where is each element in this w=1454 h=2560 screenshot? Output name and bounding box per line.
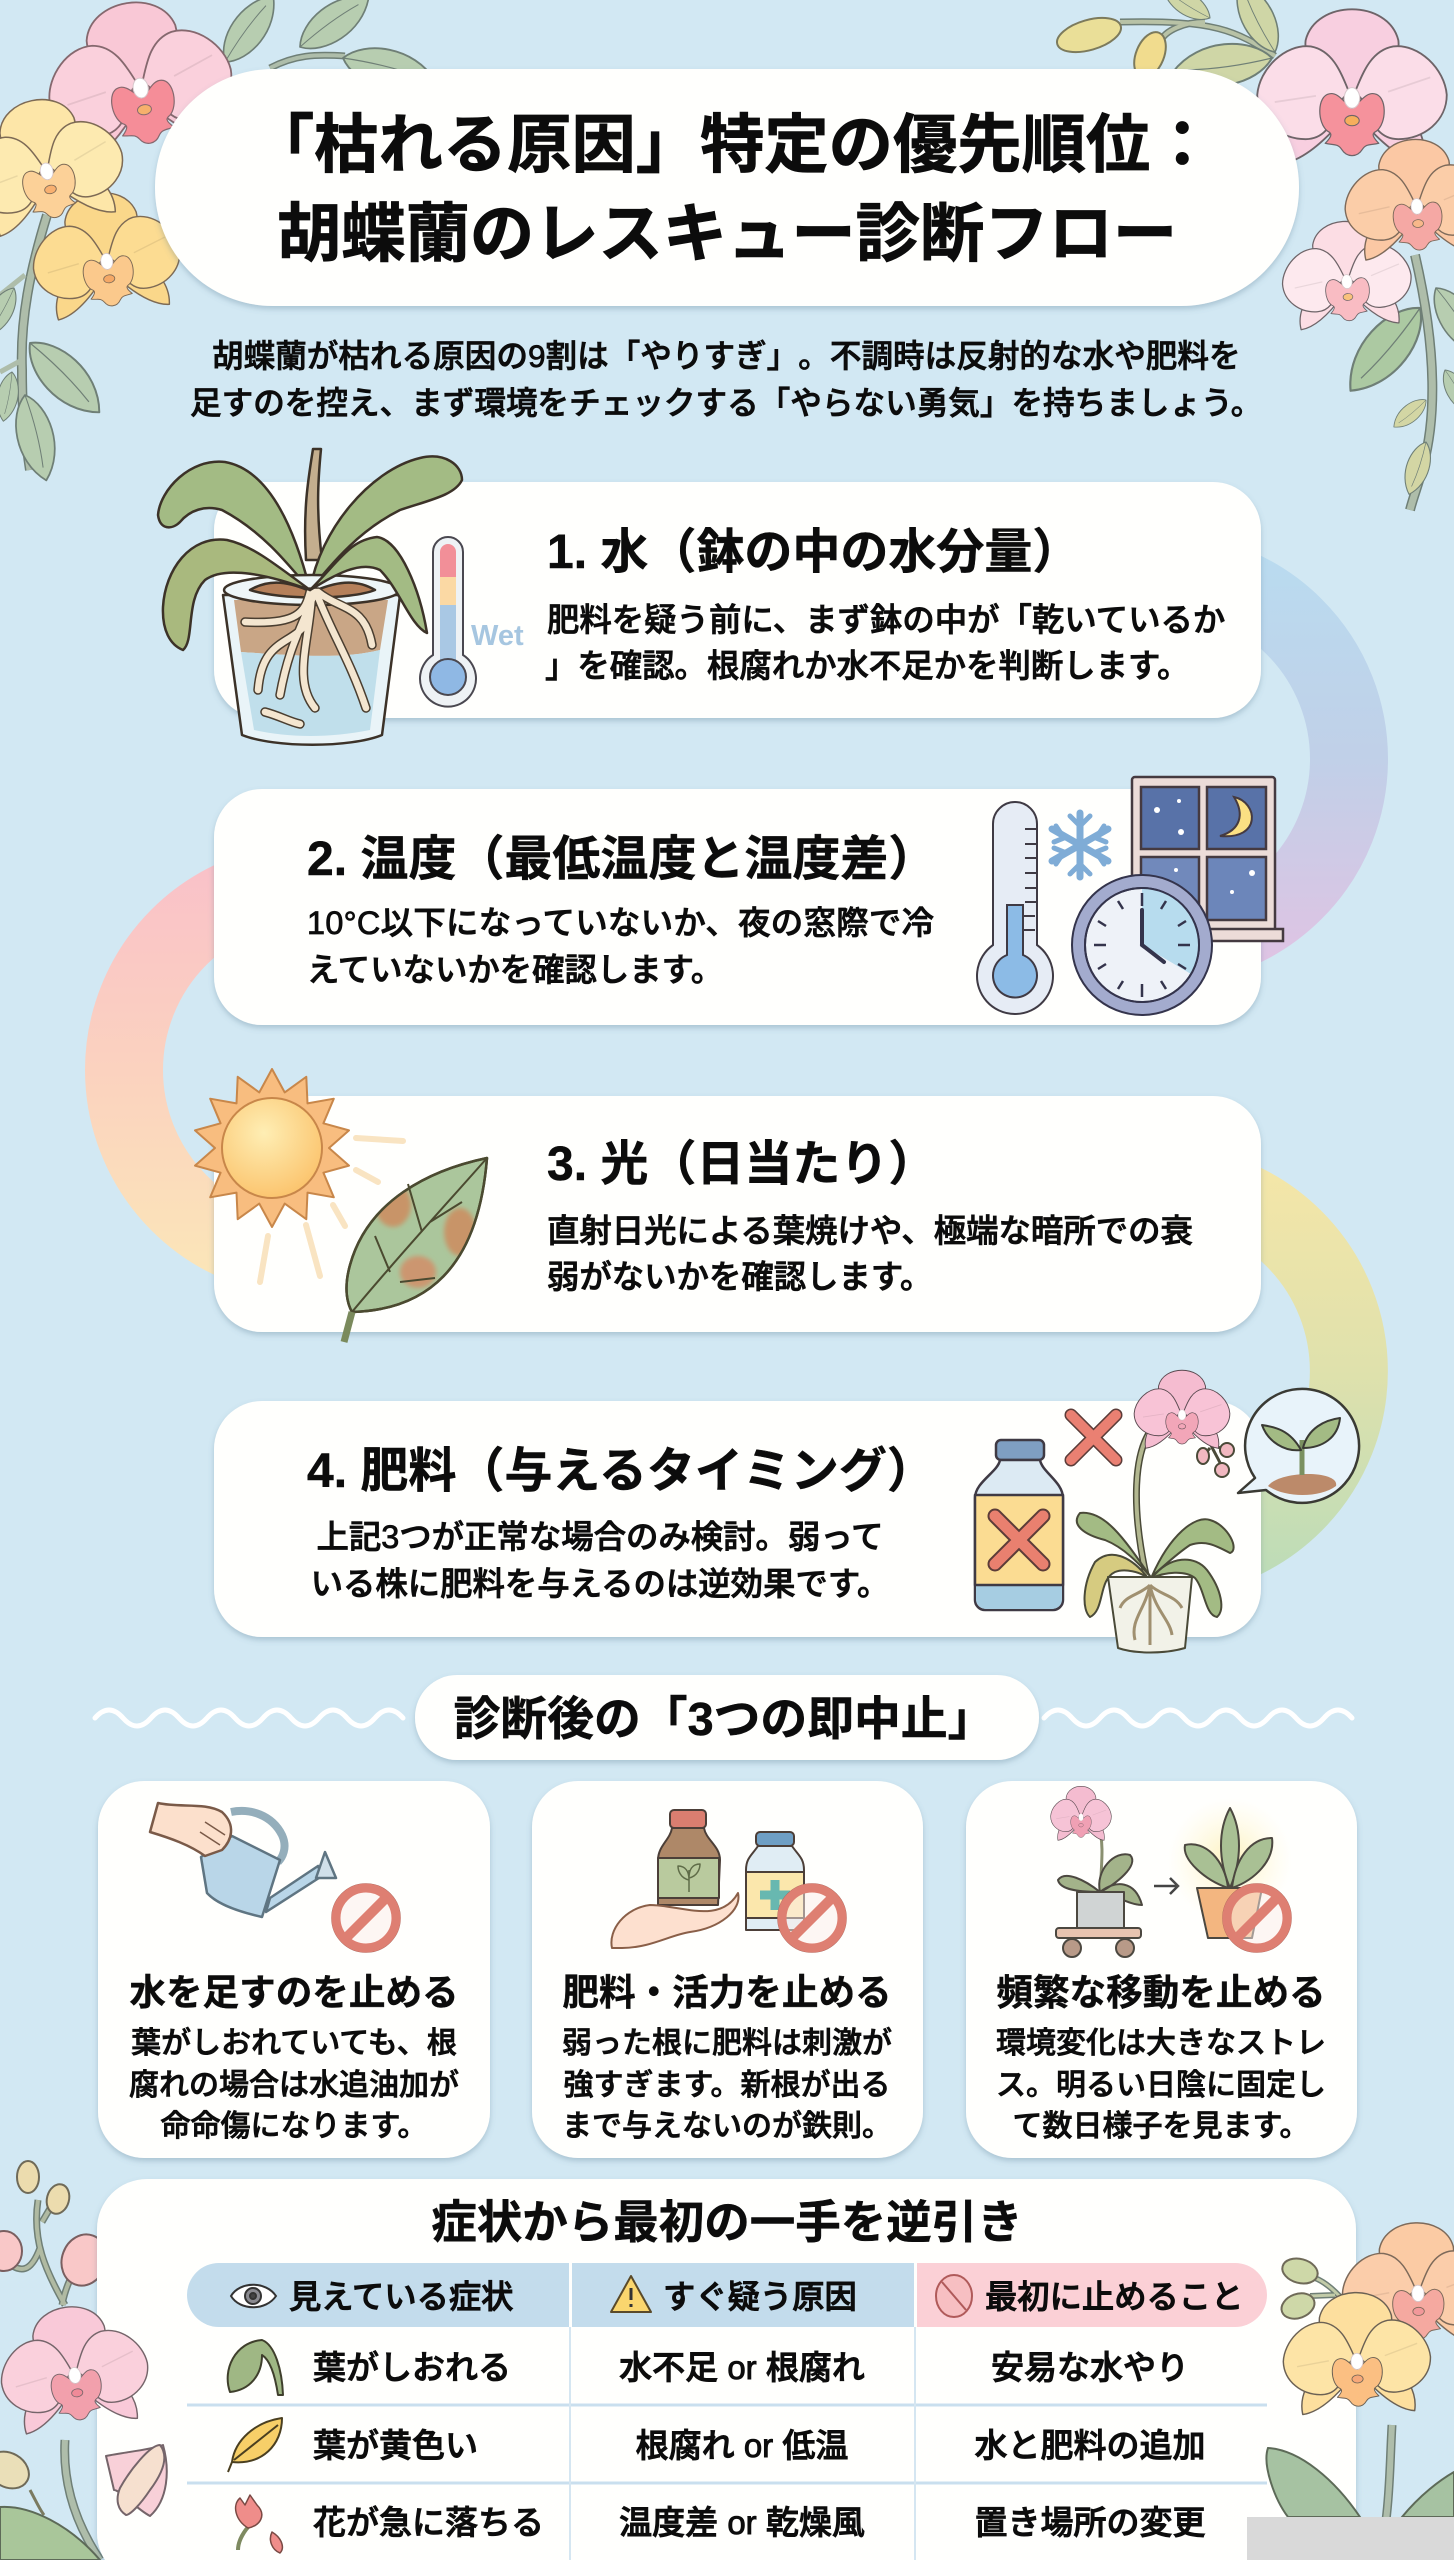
text: stop 1: 安易な水やり <box>991 2349 1189 2386</box>
text: stop header: 最初に止めること <box>985 2279 1243 2315</box>
icon: prohibition sign <box>332 1884 400 1952</box>
text: step 2 <box>307 905 934 988</box>
text: symptom header: 見えている症状 <box>289 2279 513 2315</box>
row: yellow leaves <box>228 2418 1206 2472</box>
icon: fertilizer bottle with cross <box>975 1440 1063 1610</box>
panel: stop moving <box>966 1781 1357 2158</box>
text: step 3: 弱がないかを確認します。 <box>547 1259 932 1295</box>
text: symptom 2: 葉が黄色い <box>313 2427 478 2464</box>
panel: step 1 water <box>158 449 1261 745</box>
text: step 1: 肥料を疑う前に、まず鉢の中が「乾いているか <box>547 602 1225 638</box>
row: wilted leaves <box>228 2340 1189 2395</box>
text: step 3 <box>547 1213 1193 1295</box>
icon: plant in sunlight <box>1168 1798 1292 1938</box>
icon: stop sign <box>936 2275 972 2317</box>
decoration: top-right orchids <box>1053 0 1454 510</box>
heading: step 3: 3. 光（日当たり） <box>547 1138 936 1191</box>
text: cause 2: 根腐れ or 低温 <box>636 2427 848 2464</box>
icon: scorched leaf <box>344 1158 487 1342</box>
text: step 3: 直射日光による葉焼けや、極端な暗所での衰 <box>547 1213 1193 1249</box>
heading: table title: 症状から最初の一手を逆引き <box>431 2197 1023 2248</box>
icon: watering can <box>150 1803 336 1917</box>
heading: stop moving: 頻繁な移動を止める <box>996 1972 1326 2013</box>
icon: prohibition sign <box>778 1884 846 1952</box>
heading: stop water: 水を足すのを止める <box>129 1972 459 2013</box>
decoration: bottom-right orchids <box>1266 2220 1454 2520</box>
icon: sun <box>195 1069 403 1282</box>
text: stop moving <box>996 2027 1326 2143</box>
text: stop water: 葉がしおれていても、根 <box>131 2027 457 2060</box>
text: step 1 <box>545 602 1225 684</box>
icon: speech bubble seedling <box>1238 1389 1359 1503</box>
intro text: 足すのを控え、まず環境をチェックする「やらない勇気」を持ちましょう。 <box>190 385 1262 421</box>
panel: step 2 temperature <box>214 777 1283 1025</box>
icon: prohibition sign <box>1223 1884 1291 1952</box>
icon: fallen petal <box>106 2445 167 2516</box>
divider: wave right <box>1044 1710 1352 1726</box>
text: symptom 3: 花が急に落ちる <box>313 2504 544 2541</box>
table header <box>187 2263 1267 2327</box>
icon: orchid in pot <box>1077 1370 1234 1652</box>
decoration: bottom-left orchid <box>0 2297 167 2516</box>
icon: thermometer cold <box>977 802 1053 1014</box>
panel: symptom table <box>97 2179 1356 2560</box>
title panel <box>155 69 1299 306</box>
text: cause 3: 温度差 or 乾燥風 <box>619 2504 865 2541</box>
text: stop moving: ス。明るい日陰に固定し <box>996 2069 1326 2102</box>
text: stop moving: て数日様子を見ます。 <box>1012 2110 1310 2143</box>
arrow: flow arc temperature to light <box>124 882 312 1258</box>
text: stop fertilizer: 弱った根に肥料は刺激が <box>562 2027 892 2060</box>
icon: warning triangle <box>611 2276 651 2312</box>
row: dropping flowers <box>236 2495 1206 2553</box>
intro text: 胡蝶蘭が枯れる原因の9割は「やりすぎ」。不調時は反射的な水や肥料を <box>212 338 1241 374</box>
icon: night window <box>1132 777 1283 941</box>
panel: stop fertilizer <box>532 1781 923 2158</box>
text: step 4: いる株に肥料を与えるのは逆効果です。 <box>311 1566 889 1602</box>
icon: red cross <box>1071 1415 1116 1460</box>
text: stop fertilizer: 強すぎます。新根が出る <box>564 2069 890 2102</box>
text: stop water: 命命傷になります。 <box>160 2110 428 2143</box>
title line 2: 胡蝶蘭のレスキュー診断フロー <box>277 198 1177 270</box>
text: step 2: えていないかを確認します。 <box>307 952 723 988</box>
icon: orchid on cart <box>1051 1786 1142 1957</box>
text: stop water <box>129 2027 459 2143</box>
text: stop fertilizer <box>562 2027 892 2143</box>
panel: step 4 fertilizer <box>214 1370 1359 1652</box>
panel: stop adding water <box>98 1781 490 2158</box>
icon: clock <box>1072 875 1212 1015</box>
text: cause 1: 水不足 or 根腐れ <box>619 2349 865 2386</box>
text: step 2: 10°C以下になっていないか、夜の窓際で冷 <box>307 905 934 941</box>
panel: step 3 light <box>195 1069 1261 1342</box>
icon: snowflake <box>1052 813 1108 877</box>
intro text <box>190 338 1262 421</box>
text: stop 2: 水と肥料の追加 <box>974 2427 1206 2464</box>
divider: wave left <box>95 1710 403 1726</box>
text: cause header: すぐ疑う原因 <box>663 2279 857 2315</box>
text: stop water: 腐れの場合は水追油加が <box>129 2069 459 2102</box>
arrow: flow arc light to fertilizer <box>1162 1184 1349 1558</box>
arrow: move <box>1154 1878 1178 1894</box>
text: step 4 <box>311 1519 889 1602</box>
text: stop 3: 置き場所の変更 <box>974 2504 1206 2541</box>
icon: falling flower <box>236 2495 282 2553</box>
section heading pill: 診断後の「3つの即中止」 <box>454 1693 994 1745</box>
icon: wilted leaf <box>228 2340 283 2395</box>
icon: bottles on hand <box>611 1810 804 1948</box>
text: stop fertilizer: まで与えないのが鉄則。 <box>562 2110 892 2143</box>
section heading pill <box>415 1675 1039 1760</box>
text: step 1: 」を確認。根腐れか水不足かを判断します。 <box>545 648 1190 684</box>
icon: thermometer wet <box>420 537 476 707</box>
arrow: flow arc water to temperature <box>1162 572 1349 946</box>
heading: step 1: 1. 水（鉢の中の水分量） <box>547 526 1080 579</box>
heading: step 4: 4. 肥料（与えるタイミング） <box>307 1445 935 1498</box>
title line 1: 「枯れる原因」特定の優先順位： <box>250 109 1214 181</box>
heading: stop fertilizer: 肥料・活力を止める <box>562 1972 892 2013</box>
icon: potted orchid in glass pot <box>158 449 462 745</box>
decoration: bottom-left stems and buds behind panel <box>0 2161 114 2560</box>
text: step 4: 上記3つが正常な場合のみ検討。弱って <box>316 1519 884 1555</box>
icon: yellow leaf <box>228 2418 282 2472</box>
text: symptom 1: 葉がしおれる <box>313 2349 511 2386</box>
grey corner patch <box>1247 2517 1454 2560</box>
decoration: top-left orchids <box>0 0 440 485</box>
icon: eye <box>231 2285 276 2307</box>
heading: step 2: 2. 温度（最低温度と温度差） <box>307 833 936 886</box>
text: stop moving: 環境変化は大きなストレ <box>996 2027 1326 2060</box>
label: Wet: Wet <box>471 620 524 652</box>
